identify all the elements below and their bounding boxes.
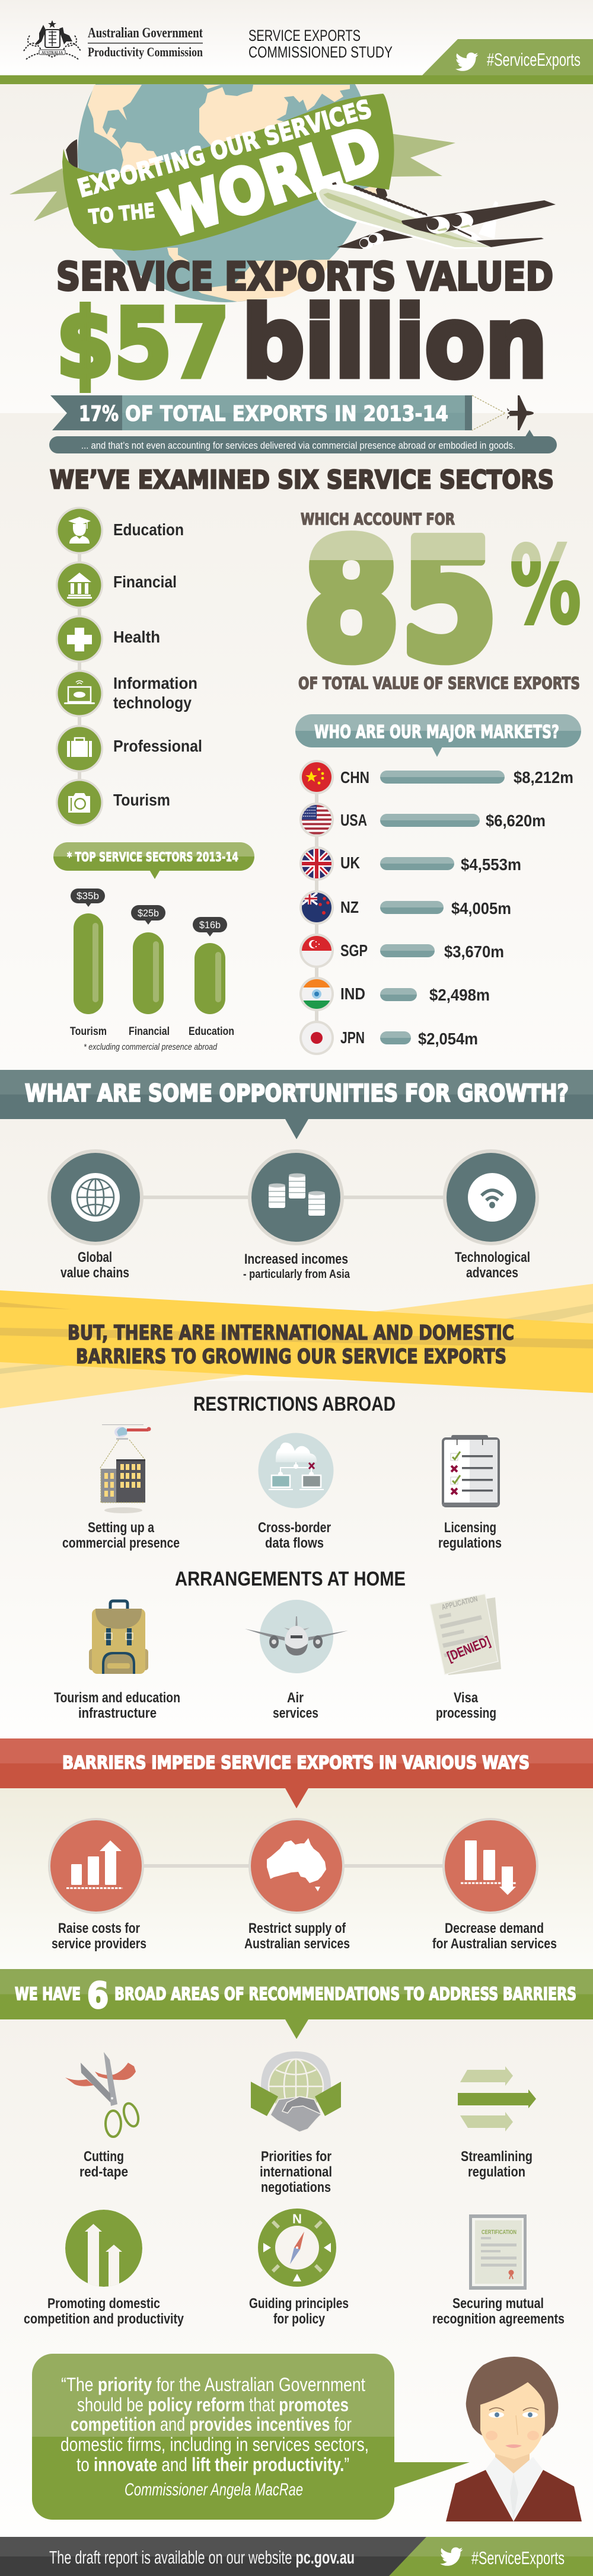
banner: opportunities for growth	[0, 1070, 593, 1139]
label	[436, 1690, 496, 1721]
stat: 85 percent: 85	[302, 505, 498, 697]
icon: globe	[78, 84, 369, 302]
rec: mutual recognition: recognition agreements	[432, 2311, 565, 2327]
market: Japan	[299, 1021, 478, 1055]
market: New Zealand: $4,005m	[451, 899, 511, 918]
sector: financial: Financial	[113, 573, 177, 591]
effect: raise costs	[48, 1818, 146, 1952]
opportunity: technological advances: advances	[466, 1265, 518, 1281]
quote text: “The priority for the Australian Government	[61, 2374, 365, 2395]
heading: ARRANGEMENTS AT HOME	[175, 1568, 406, 1590]
market: China: CHN	[340, 768, 369, 787]
heading pill	[295, 714, 581, 757]
heading pill: * TOP SERVICE SECTORS 2013-14	[67, 850, 238, 864]
label	[273, 1690, 318, 1721]
opportunity: technological advances: Technological	[455, 1249, 530, 1265]
headline: $57 billion	[56, 286, 547, 399]
sector: information technology: Information	[113, 674, 197, 692]
label	[54, 1690, 180, 1721]
opportunity: technological advances	[443, 1149, 539, 1281]
label: processing	[436, 1705, 496, 1721]
sector: health	[56, 615, 160, 663]
rec: guiding principles: for policy	[273, 2311, 326, 2327]
rec: streamlining regulation: Streamlining	[461, 2149, 533, 2165]
label: Tourism and education	[54, 1690, 180, 1706]
icon: twitter bird	[440, 2548, 463, 2566]
bar: education	[189, 917, 234, 1038]
header bar	[0, 0, 593, 84]
label: services	[273, 1705, 318, 1721]
quote text: competition and provides incentives for	[71, 2414, 352, 2435]
callout: commissioner quote	[32, 2354, 470, 2520]
headline: $57 billion: $57	[56, 288, 229, 399]
market: UK	[299, 846, 521, 881]
rec: streamlining regulation: regulation	[468, 2164, 525, 2180]
twitter tab	[422, 39, 593, 75]
ribbon: 17% of total exports	[50, 395, 534, 430]
icon: data flows	[259, 1433, 333, 1508]
rec: cutting red-tape: red-tape	[79, 2164, 128, 2180]
rec: mutual recognition	[432, 2214, 565, 2327]
study title: COMMISSIONED STUDY	[248, 43, 393, 61]
market: New Zealand: NZ	[340, 898, 359, 916]
study title: SERVICE EXPORTS	[248, 27, 361, 44]
panel: restrictions abroad	[62, 1393, 502, 1551]
panel: major markets	[295, 714, 581, 1055]
text: exporting our services: EXPORTING OUR SERVICES	[75, 94, 375, 203]
effect: raise costs: Raise costs for	[58, 1920, 140, 1936]
bar: tourism: Tourism	[70, 1025, 107, 1038]
market: UK: $4,553m	[461, 855, 521, 874]
chart: top service sectors	[53, 842, 254, 1052]
sector: education	[56, 507, 184, 554]
ribbon: 17% of total exports: OF TOTAL EXPORTS IN 2013-14	[125, 402, 448, 426]
effect: restrict supply: Australian services	[244, 1936, 350, 1952]
rec: international negotiations	[251, 2051, 341, 2195]
effect: raise costs: service providers	[52, 1936, 146, 1952]
label: regulations	[438, 1535, 502, 1551]
opportunity: global value chains	[47, 1149, 144, 1281]
effect: decrease demand: Decrease demand	[445, 1920, 544, 1936]
footer text: The draft report is available on our website pc.gov.au	[49, 2547, 355, 2568]
icon: denied visa application: APPLICATION	[441, 1594, 479, 1612]
sector: professional: Professional	[113, 737, 202, 755]
effect: restrict supply: Restrict supply of	[248, 1920, 346, 1936]
icon: clipboard	[442, 1435, 499, 1506]
banner: barriers in yellow	[0, 1284, 593, 1408]
crest scroll text: AUSTRALIA	[42, 50, 63, 55]
panel: opportunities	[47, 1149, 539, 1281]
effect: restrict supply	[244, 1818, 350, 1952]
callout: note: ... and that’s not even accounting for services delivered via commercial presence abroad or embodied in goods.	[81, 440, 515, 451]
bar: tourism: $35b	[76, 890, 99, 902]
text: to the: TO THE	[88, 199, 156, 229]
rec: promoting competition	[24, 2210, 184, 2327]
icon: plane front view	[245, 1600, 348, 1673]
stat: 85 percent: WHICH ACCOUNT FOR	[301, 510, 455, 529]
heading pill	[53, 842, 254, 879]
opportunity: global value chains: value chains	[60, 1265, 129, 1281]
market: Japan: $2,054m	[418, 1030, 478, 1048]
opportunity: increased incomes: - particularly from Asia	[243, 1268, 350, 1281]
green banner	[62, 94, 394, 251]
market: Singapore	[299, 934, 504, 968]
opportunity: global value chains: Global	[78, 1249, 112, 1265]
label: Cross-border	[258, 1520, 331, 1536]
effect: decrease demand	[432, 1818, 557, 1952]
logo wordmark	[88, 25, 203, 59]
panel: six sectors list	[56, 507, 202, 826]
label: Setting up a	[88, 1520, 155, 1536]
icon: small plane	[507, 395, 534, 430]
heading: RESTRICTIONS ABROAD	[193, 1393, 396, 1415]
label: infrastructure	[78, 1705, 157, 1721]
quote text: should be policy reform that promotes	[77, 2394, 349, 2415]
rec: mutual recognition: Securing mutual	[452, 2296, 544, 2312]
market: India: $2,498m	[429, 986, 490, 1004]
rec: cutting red-tape	[65, 2052, 141, 2180]
icon: denied visa application	[430, 1594, 501, 1675]
rec: international negotiations: Priorities for	[261, 2149, 331, 2165]
sector: financial	[56, 561, 177, 609]
quote text: Commissioner Angela MacRae	[125, 2480, 303, 2500]
sector: information technology: technology	[113, 693, 192, 712]
label	[258, 1520, 331, 1551]
market: China	[299, 760, 573, 794]
icon: large plane	[316, 181, 556, 249]
rec: promoting competition: competition and productivity	[24, 2311, 184, 2327]
rec: streamlining regulation	[458, 2066, 536, 2180]
bar: tourism	[70, 889, 107, 1038]
rec: international negotiations: negotiations	[261, 2179, 331, 2195]
label: Visa	[454, 1690, 479, 1706]
text: world: WORLD	[153, 113, 390, 251]
label: Air	[287, 1690, 304, 1706]
illustration: globe with banner and plane	[9, 84, 556, 302]
market: USA: USA	[340, 811, 367, 829]
label	[438, 1520, 502, 1551]
sector: information technology	[56, 670, 197, 717]
icon: backpack	[89, 1601, 148, 1674]
icon: helicopter lifting building	[100, 1424, 151, 1513]
sector: tourism: Tourism	[113, 791, 170, 809]
market: Japan: JPN	[340, 1028, 365, 1047]
market: Singapore: SGP	[340, 941, 368, 960]
opportunity: increased incomes: Increased incomes	[244, 1251, 348, 1267]
sector: education: Education	[113, 520, 184, 539]
banner: six recommendations: 6	[87, 1975, 109, 2016]
label: Licensing	[444, 1520, 496, 1536]
footnote: * excluding commercial presence abroad	[84, 1042, 218, 1052]
panel: arrangements at home	[54, 1568, 501, 1721]
illustration: commissioner portrait	[446, 2357, 582, 2521]
market: USA: $6,620m	[486, 811, 546, 830]
market: India: IND	[340, 985, 365, 1003]
bar: financial	[129, 905, 170, 1038]
panel: barrier effects	[48, 1818, 557, 1952]
banner: six recommendations	[0, 1969, 593, 2039]
market: Singapore: $3,670m	[444, 942, 504, 961]
sector: health: Health	[113, 628, 160, 646]
effect: decrease demand: for Australian services	[432, 1936, 557, 1952]
bar: education: $16b	[199, 919, 221, 931]
bar: financial: Financial	[129, 1025, 170, 1038]
bar: education: Education	[189, 1025, 234, 1038]
study title	[248, 27, 393, 61]
label	[62, 1520, 180, 1551]
banner text	[75, 94, 390, 251]
footer bar	[0, 2537, 593, 2576]
label: data flows	[265, 1535, 324, 1551]
banner: six recommendations: WE HAVE	[15, 1984, 81, 2004]
label: commercial presence	[62, 1535, 180, 1551]
market: India	[299, 977, 490, 1011]
ribbon tails	[9, 134, 455, 221]
market: New Zealand	[299, 890, 511, 925]
icon: denied visa application: [DENIED]	[445, 1633, 492, 1664]
rec: guiding principles	[249, 2209, 349, 2327]
rec: guiding principles: Guiding principles	[249, 2296, 349, 2312]
quote text	[60, 2374, 369, 2500]
headline: $57 billion: billion	[242, 286, 547, 399]
rec: cutting red-tape: Cutting	[84, 2149, 124, 2165]
sector: tourism	[56, 779, 170, 826]
opportunity: increased incomes	[243, 1149, 350, 1281]
market: China: $8,212m	[514, 768, 573, 787]
rec: promoting competition: Promoting domestic	[47, 2296, 160, 2312]
rec: guiding principles: N	[292, 2211, 302, 2226]
quote text: to innovate and lift their productivity.”	[76, 2454, 349, 2475]
market: USA	[299, 803, 546, 837]
callout: note	[49, 430, 557, 453]
banner back fold	[66, 139, 78, 172]
icon: coat of arms	[24, 20, 81, 59]
panel: recommendations	[24, 2051, 565, 2327]
market: UK: UK	[340, 854, 360, 872]
rec: mutual recognition: CERTIFICATION	[482, 2229, 517, 2236]
banner: barriers impede	[0, 1738, 593, 1808]
bar: financial: $25b	[138, 907, 159, 919]
ribbon: 17% of total exports: 17%	[79, 402, 119, 426]
sector: professional	[56, 725, 202, 772]
logo wordmark: Productivity Commission	[88, 44, 203, 59]
rec: international negotiations: international	[260, 2164, 332, 2180]
icon: twitter bird	[455, 53, 478, 71]
quote text: domestic firms, including in services sectors,	[60, 2434, 369, 2455]
logo wordmark: Australian Government	[88, 25, 203, 41]
